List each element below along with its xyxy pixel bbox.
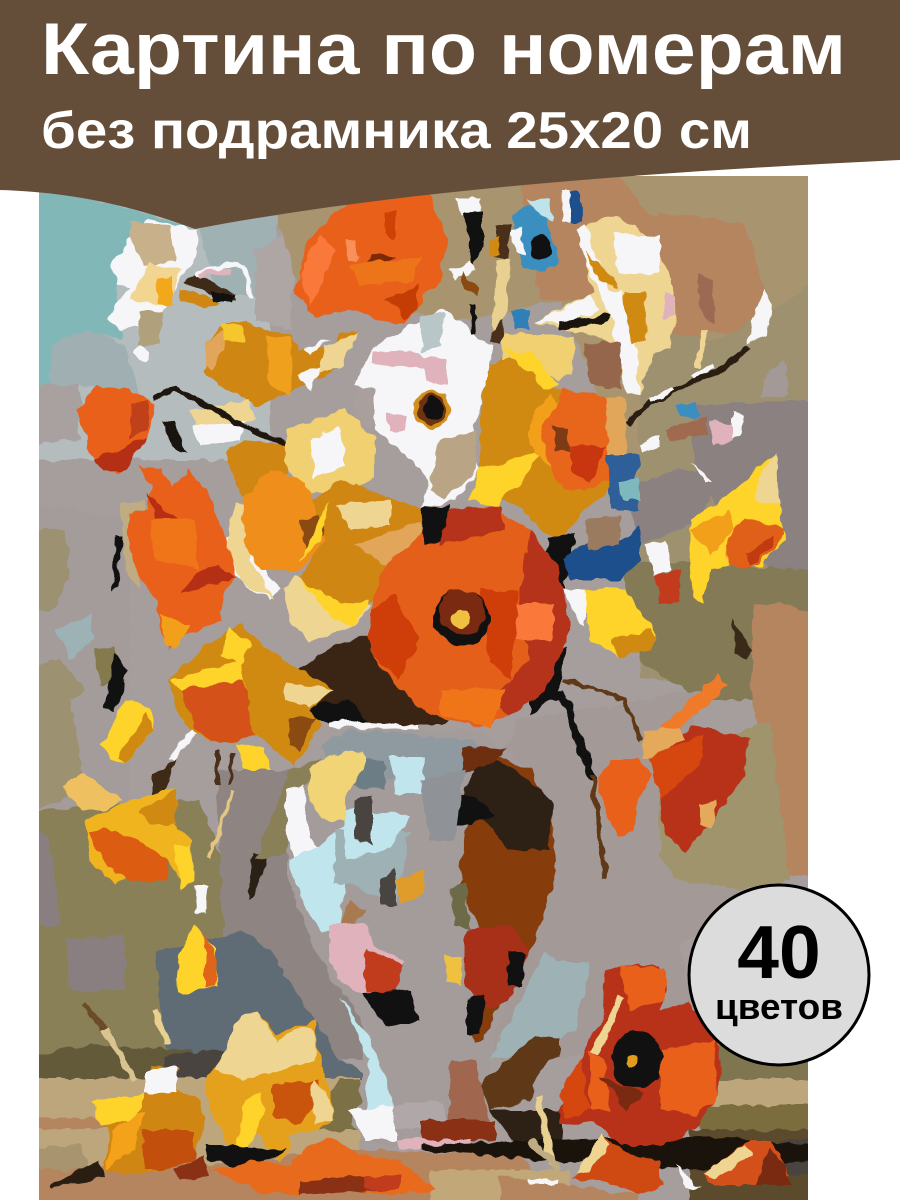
badge: 40 colours <box>689 885 869 1065</box>
icon: blue-grey highlight right of vase <box>490 950 590 1060</box>
icon: yellow flower upper left <box>204 319 359 406</box>
icon: orange iris left <box>112 468 236 650</box>
subtitle: без подрамника 25х20 см <box>41 102 752 160</box>
icon: fallen orange petals bottom <box>212 1138 435 1195</box>
icon: blue cornflowers right <box>545 455 752 660</box>
icon: yellow flower far right <box>690 455 785 603</box>
icon: white flower top left <box>109 219 199 361</box>
icon: white anemone centre <box>355 308 493 510</box>
icon: yellow buds left <box>100 700 217 992</box>
icon: fallen yellow flowers bottom left <box>50 1012 335 1188</box>
icon: yellow daffodil right centre <box>467 333 628 543</box>
icon: cream iris top right <box>537 216 677 396</box>
icon: orange flower right of vase <box>597 680 750 852</box>
icon: big red poppy centre <box>370 505 570 728</box>
background colour patches <box>20 150 820 1200</box>
icon: dark stems at vase neck <box>95 630 640 880</box>
icon: white and cream petals under stem <box>190 400 255 445</box>
icon: thin stems below flower <box>83 730 320 1080</box>
icon: fallen red poppy bottom right <box>558 965 790 1195</box>
icon: large yellow flower centre <box>222 410 430 642</box>
icon: dark leaf mass bottom right of vase <box>420 1035 810 1184</box>
badge: 40 colours: 40 <box>737 910 821 994</box>
icon: blue flowers and stems top <box>450 190 584 345</box>
title: Картина по номерам <box>41 7 846 90</box>
icon: vase <box>286 720 556 1150</box>
badge: 40 colours: цветов <box>715 986 843 1027</box>
panel: header banner <box>0 0 900 229</box>
icon: yellow iris left lower <box>61 773 208 915</box>
icon: orange poppy top <box>294 190 447 325</box>
icon: dark seed pod <box>179 266 250 308</box>
icon: branch and small flowers right <box>628 275 773 482</box>
icon: yellow and red flower left of vase <box>168 625 335 770</box>
icon: small red poppy left with stem <box>78 386 288 473</box>
panel: painting <box>20 150 820 1200</box>
